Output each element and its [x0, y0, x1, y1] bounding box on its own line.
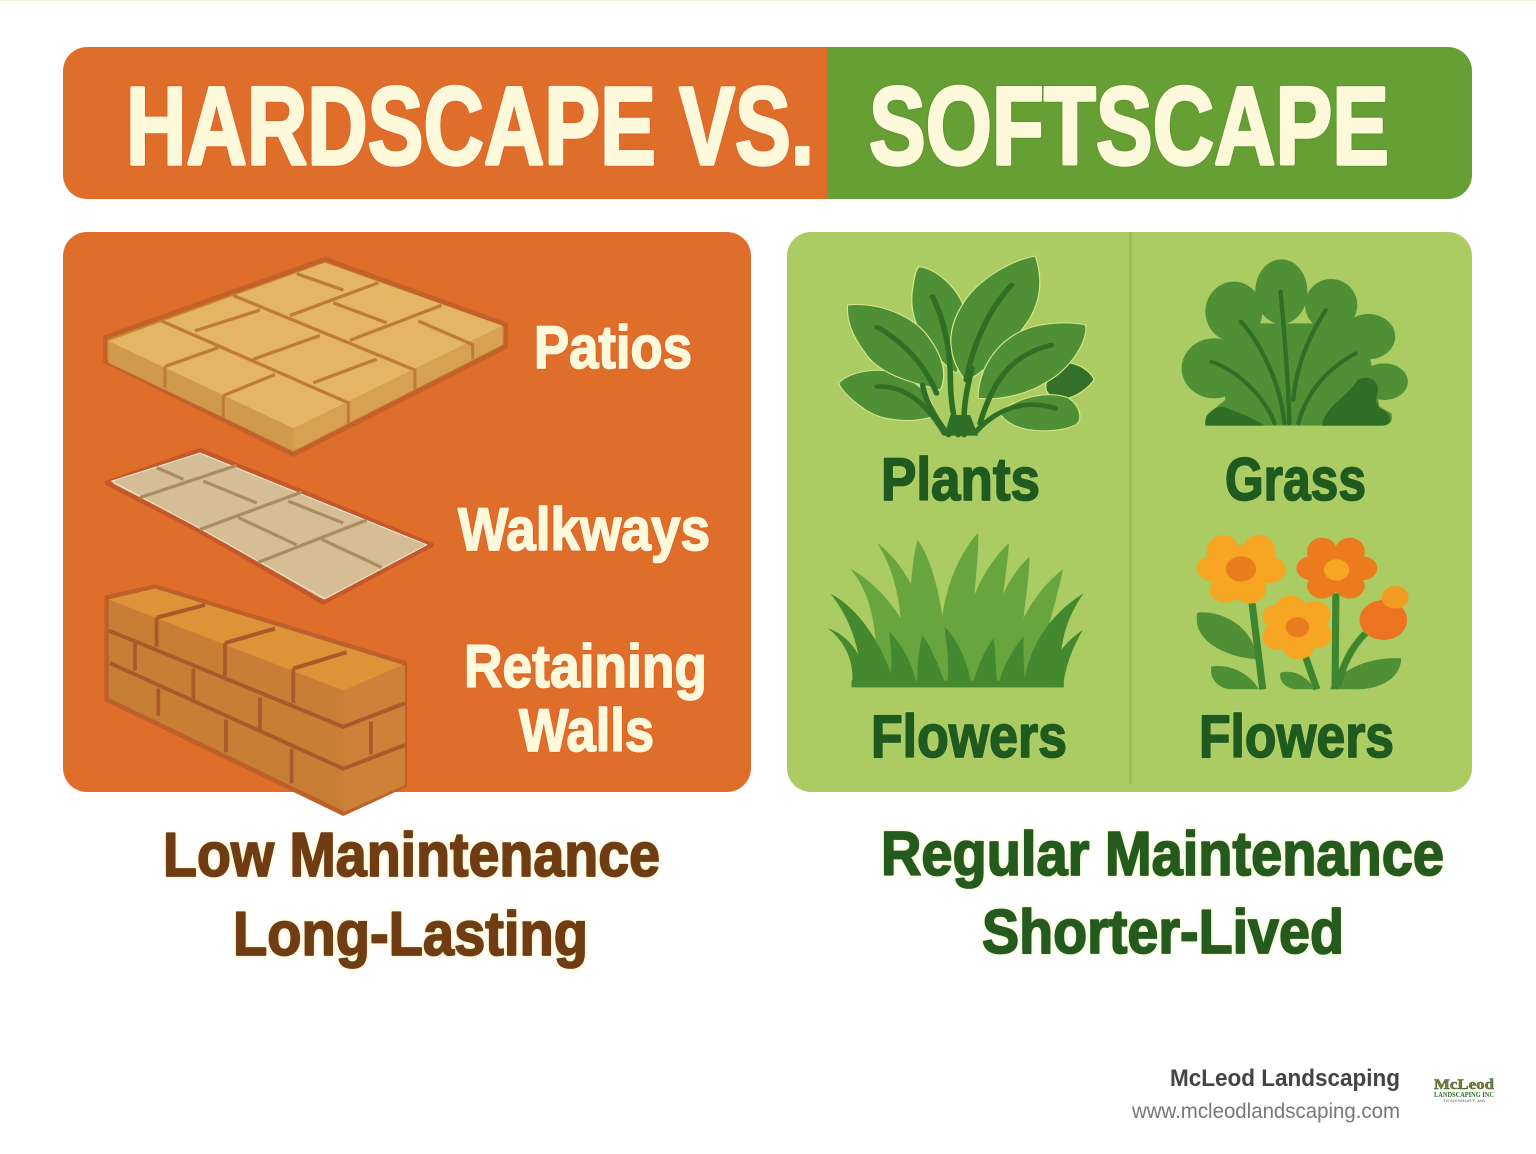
label: flowers (left): Flowers	[871, 703, 1067, 770]
icon: brick retaining wall	[107, 587, 405, 813]
banner left: hardscape: HARDSCAPE VS.	[126, 65, 814, 188]
label: plants: Plants	[881, 446, 1040, 513]
title banner	[63, 47, 1472, 199]
banner right: softscape: SOFTSCAPE	[869, 65, 1389, 188]
footer credit: McLeod Landscaping	[1170, 1065, 1400, 1092]
logo: McLeod Landscaping	[1434, 1077, 1495, 1103]
label: retaining walls: Retaining	[464, 633, 707, 700]
banner left: hardscape	[63, 47, 827, 199]
panel: softscape	[787, 232, 1472, 792]
softscape summary text	[881, 820, 1444, 967]
footer credit	[1131, 1065, 1400, 1123]
label: retaining walls: Walls	[519, 697, 654, 764]
hardscape summary text	[163, 821, 660, 969]
footer credit: www.mcleodlandscaping.com	[1131, 1100, 1400, 1123]
label: walkways: Walkways	[458, 496, 710, 563]
icon: orange flowers	[1197, 535, 1409, 689]
icon: rounded shrub	[1182, 259, 1408, 426]
label: grass: Grass	[1225, 446, 1366, 513]
hardscape summary text: Long-Lasting	[233, 900, 588, 969]
softscape summary text: Shorter-Lived	[982, 898, 1344, 967]
label: retaining walls	[464, 633, 707, 764]
icon: grass tuft	[828, 533, 1084, 687]
logo: McLeod Landscaping: LANDSCAPING INC	[1434, 1091, 1494, 1099]
label: flowers (right): Flowers	[1199, 703, 1394, 770]
label: patios: Patios	[534, 314, 692, 381]
softscape summary text: Regular Maintenance	[881, 820, 1444, 889]
panel: hardscape	[63, 232, 751, 813]
hardscape summary text: Low Manintenance	[163, 821, 660, 890]
logo: McLeod Landscaping: TEWKSBURY, MA	[1443, 1098, 1485, 1103]
logo: McLeod Landscaping: McLeod	[1434, 1077, 1495, 1093]
icon: leafy plant	[838, 256, 1094, 436]
icon: walkway stones	[107, 450, 432, 602]
icon: patio pavers	[105, 259, 506, 455]
